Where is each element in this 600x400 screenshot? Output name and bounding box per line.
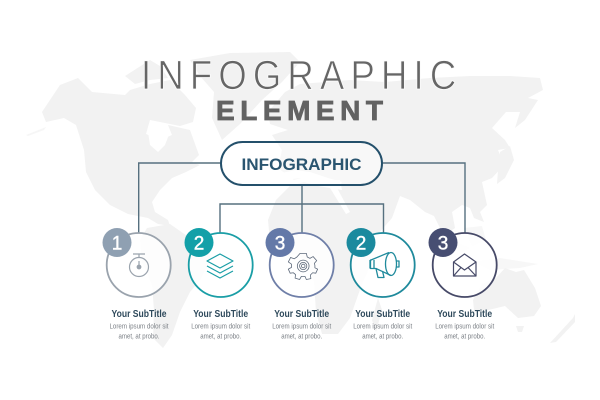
- description 4: Lorem ipsum dolor sit: [353, 324, 412, 330]
- title: ELEMENT: ELEMENT: [216, 95, 383, 126]
- description 1: amet, at probo.: [118, 334, 160, 340]
- subtitle 2: Your SubTitle: [193, 308, 248, 320]
- world map background: [26, 52, 575, 348]
- step 2: layers: [184, 228, 253, 340]
- icon: stopwatch: [130, 254, 148, 276]
- subtitle 1: Your SubTitle: [112, 308, 167, 320]
- description 5: [435, 324, 494, 340]
- subtitle 5: Your SubTitle: [437, 308, 492, 320]
- step 5: envelope: [428, 228, 497, 340]
- central pill label: INFOGRAPHIC: [242, 156, 362, 174]
- description 2: Lorem ipsum dolor sit: [191, 324, 250, 330]
- step 4: megaphone: [346, 228, 415, 340]
- icon: megaphone: [370, 252, 399, 278]
- badge 5: 3: [438, 234, 448, 254]
- description 5: amet, at probo.: [444, 334, 485, 340]
- step 3: gear: [266, 228, 334, 340]
- description 3: [272, 324, 331, 340]
- badge 4: 2: [356, 234, 366, 254]
- subtitle 3: Your SubTitle: [274, 308, 329, 320]
- description 1: [110, 324, 169, 340]
- description 4: [353, 324, 412, 340]
- icon: envelope: [454, 254, 476, 276]
- central pill label: [221, 142, 382, 185]
- icon: gear: [288, 253, 318, 280]
- description 4: amet, at probo.: [362, 334, 403, 340]
- description 5: Lorem ipsum dolor sit: [435, 324, 494, 330]
- description 1: Lorem ipsum dolor sit: [110, 324, 169, 330]
- description 3: Lorem ipsum dolor sit: [272, 324, 331, 330]
- step 1: stopwatch: [102, 228, 171, 340]
- connector lines: [139, 163, 465, 233]
- subtitle 4: Your SubTitle: [355, 308, 410, 320]
- description 3: amet, at probo.: [281, 334, 322, 340]
- title: INFOGRAPHIC: INFOGRAPHIC: [141, 53, 462, 98]
- badge 2: 2: [194, 234, 204, 254]
- badge 1: 1: [112, 234, 122, 254]
- description 2: [191, 324, 250, 340]
- description 2: amet, at probo.: [200, 334, 241, 340]
- badge 3: 3: [275, 234, 285, 254]
- icon: layers: [207, 254, 233, 278]
